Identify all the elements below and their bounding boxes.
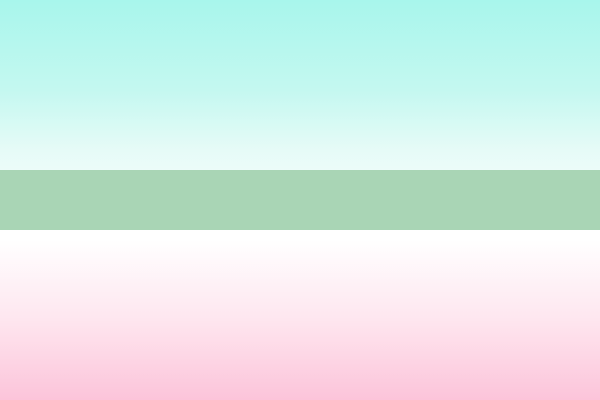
bottom pink gradient [0, 200, 600, 400]
title band, text intentionally omitted [0, 170, 600, 230]
top teal gradient [0, 0, 600, 200]
